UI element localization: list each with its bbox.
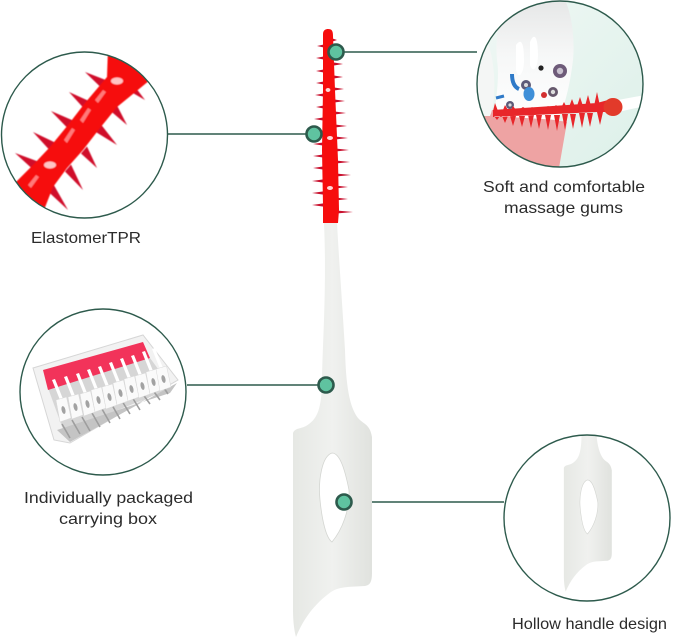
label: Individually packaged carrying box: carrying box xyxy=(59,511,157,528)
label: Soft and comfortable massage gums xyxy=(483,179,645,217)
miniature brush xyxy=(619,96,642,112)
gum and tooth illustration xyxy=(477,0,645,168)
label: ElastomerTPR: ElastomerTPR xyxy=(31,230,141,247)
connector lines xyxy=(168,52,504,502)
panel: Hollow handle design xyxy=(503,434,671,602)
magnified handle xyxy=(564,436,612,592)
label: Soft and comfortable massage gums: massage gums xyxy=(504,200,623,217)
hollow window xyxy=(320,453,349,542)
callout dots xyxy=(306,44,352,510)
clear box with brushes xyxy=(33,335,178,443)
red brush core xyxy=(322,29,339,223)
red bristle spikes xyxy=(312,38,353,214)
microbes xyxy=(496,64,567,109)
rows of handles xyxy=(52,348,171,422)
label: Individually packaged carrying box xyxy=(24,490,193,528)
label: Soft and comfortable massage gums: Soft and comfortable xyxy=(483,179,645,196)
white handle with hollow xyxy=(293,223,372,637)
product: interdental brush xyxy=(293,29,372,637)
panel: Individually packaged carrying box xyxy=(20,309,186,475)
magnified bristle xyxy=(14,56,148,210)
panel: ElastomerTPR xyxy=(2,48,168,218)
panel: Soft and comfortable massage gums xyxy=(477,0,645,168)
bristle core highlights xyxy=(326,88,333,190)
label: Hollow handle design: Hollow handle design xyxy=(512,616,667,633)
label: Individually packaged carrying box: Individually packaged xyxy=(24,490,193,507)
